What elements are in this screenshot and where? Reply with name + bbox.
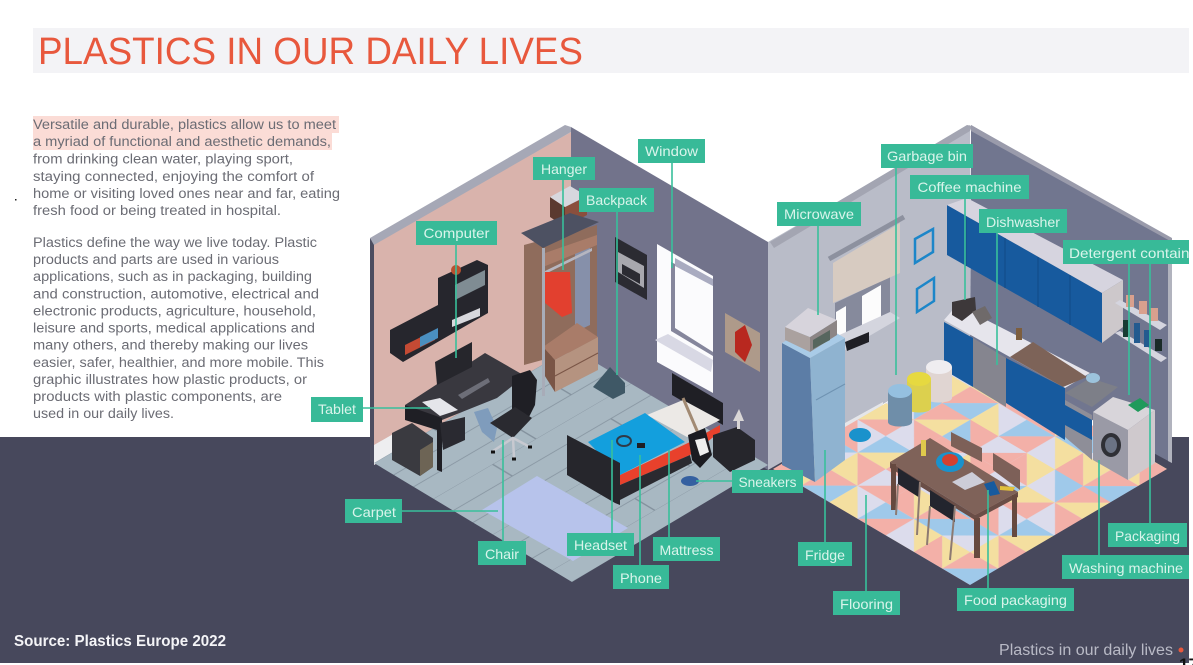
intro text block: first paragraph: from drinking clean water, playing sport, (33, 152, 293, 166)
intro text block: second paragraph: graphic illustrates how plastic products, or (33, 372, 308, 387)
computer desk (392, 342, 525, 476)
intro text block: first paragraph: fresh food or being treated in hospital. (33, 203, 281, 218)
nightstand and lamp (713, 409, 755, 472)
intro text block: second paragraph: applications, such as in packaging, building (33, 269, 312, 284)
picture frames (915, 229, 934, 312)
title band (33, 28, 1189, 73)
sneakers (681, 476, 699, 486)
label: Window: Window (645, 143, 699, 159)
label: Sneakers (696, 470, 803, 493)
intro text block: second paragraph: products and parts are used in various (33, 252, 279, 267)
source note: Source: Plastics Europe 2022 (14, 633, 226, 650)
microwave (785, 308, 837, 352)
dark lower background (0, 437, 1189, 663)
bedroom walls (370, 125, 768, 470)
label: Tablet (311, 397, 430, 422)
intro text block: second paragraph: and construction, automotive, electrical and (33, 286, 319, 302)
footer caption: Plastics in our daily lives (999, 642, 1173, 659)
carpet (482, 476, 628, 561)
headset and phone (617, 436, 645, 448)
label: Window (638, 139, 705, 268)
intro text block: second paragraph: Plastics define the way we live today. Plastic (33, 235, 317, 250)
label: Mattress: Mattress (660, 542, 714, 558)
label: Phone (613, 455, 669, 589)
label: Fridge (798, 450, 852, 566)
label: Detergent container (1063, 240, 1193, 395)
gas stove (1065, 373, 1118, 407)
intro text block: second paragraph (33, 235, 324, 421)
wall shelves with containers (1115, 295, 1167, 362)
intro text block: second paragraph: easier, safer, healthier, and more mobile. This (33, 355, 324, 370)
label: Packaging: Packaging (1115, 528, 1180, 544)
clothes on floor (474, 408, 497, 442)
intro text block: first paragraph: home or visiting loved ones near and far, eating (33, 186, 340, 201)
label: Garbage bin (881, 144, 973, 375)
wall shelves (390, 260, 488, 362)
intro text block: first paragraph (33, 116, 340, 218)
label: Computer: Computer (424, 225, 490, 241)
label: Hanger (533, 157, 595, 270)
label: Packaging (1108, 264, 1187, 547)
kitchen counter and lower cabinets (944, 305, 1092, 460)
label: Flooring: Flooring (840, 596, 893, 612)
backpack (593, 367, 625, 399)
label: Headset (567, 440, 634, 556)
intro text block: first paragraph: Versatile and durable, plastics allow us to meet (33, 117, 336, 132)
label: Computer (416, 221, 497, 358)
kitchen walls (768, 125, 1172, 470)
label: Food packaging: Food packaging (964, 592, 1067, 608)
title: PLASTICS IN OUR DAILY LIVES (38, 31, 583, 73)
patterned floor (773, 354, 1167, 585)
office chair (490, 370, 537, 459)
label: Backpack: Backpack (586, 192, 648, 208)
fridge (782, 322, 845, 482)
guitar (683, 398, 712, 468)
label: Phone: Phone (620, 570, 662, 586)
intro text block: second paragraph: many others, and thereby making our lives (33, 338, 308, 352)
coffee machine and counter items (952, 297, 1022, 340)
label: Food packaging (957, 490, 1074, 611)
upper cabinets (947, 198, 1123, 343)
panel: kitchen (768, 125, 1172, 585)
label: Microwave: Microwave (784, 206, 854, 222)
label: Coffee machine (910, 175, 1029, 300)
label: Garbage bin: Garbage bin (887, 148, 967, 164)
intro text block: first paragraph: a myriad of functional and aesthetic demands, (33, 134, 331, 149)
label: Chair: Chair (485, 546, 519, 562)
label: Carpet (345, 499, 498, 523)
label: Detergent container: Detergent container (1069, 245, 1193, 261)
label: Dishwasher (979, 209, 1067, 365)
robot vacuum (849, 428, 871, 442)
intro text block: second paragraph: used in our daily lives. (33, 406, 174, 421)
intro text block: second paragraph: leisure and sports, medical applications and (33, 320, 315, 336)
label: Microwave (777, 202, 861, 315)
label: Backpack (579, 188, 654, 375)
label: Fridge: Fridge (805, 547, 845, 563)
panel: bedroom (370, 125, 768, 582)
label: Coffee machine: Coffee machine (918, 179, 1022, 195)
label: Washing machine (1062, 460, 1189, 579)
intro text block: second paragraph: electronic products, agriculture, household, (33, 304, 316, 318)
label: Tablet: Tablet (318, 401, 356, 417)
label: Carpet: Carpet (352, 504, 396, 520)
label: Mattress (653, 450, 720, 561)
wall art (725, 313, 760, 372)
clock (845, 332, 869, 351)
poster (615, 237, 647, 300)
intro text block: second paragraph: products with plastic components, are (33, 389, 282, 404)
bedroom plank floor (374, 348, 768, 582)
bed (567, 373, 723, 505)
small stray dot (15, 199, 16, 200)
window and blind (829, 217, 904, 352)
wardrobe (521, 186, 599, 396)
window (655, 244, 713, 393)
label: Headset: Headset (574, 537, 627, 553)
label: Chair (478, 440, 526, 565)
label: Washing machine: Washing machine (1069, 560, 1183, 576)
label: Dishwasher: Dishwasher (986, 214, 1060, 230)
garbage bins (888, 360, 952, 426)
washing machine (1093, 397, 1155, 480)
label: Hanger: Hanger (541, 161, 587, 177)
label: Flooring (833, 495, 900, 615)
label: Sneakers: Sneakers (738, 474, 796, 490)
intro text block: first paragraph: staying connected, enjoying the comfort of (33, 169, 314, 184)
dining table with chairs (890, 432, 1020, 560)
